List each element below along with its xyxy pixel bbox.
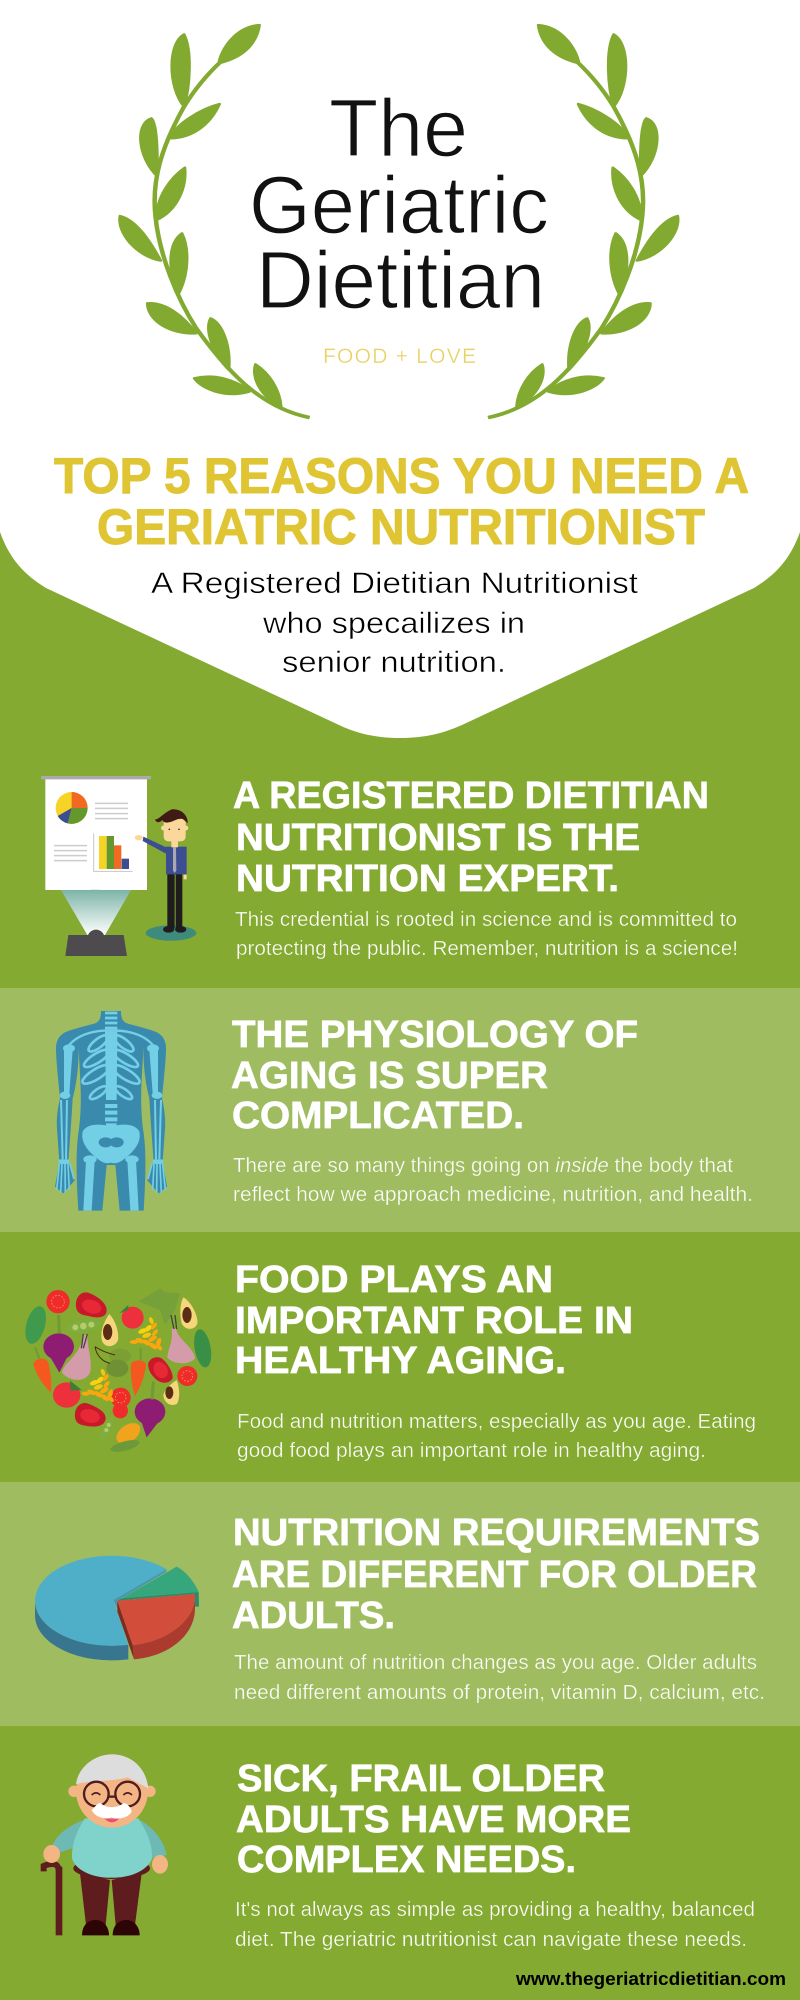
heading: HEALTHY AGING.: [235, 1340, 566, 1382]
left branch: [120, 25, 310, 418]
heading: [231, 1014, 638, 1137]
title: GERIATRIC NUTRITIONIST: [97, 499, 705, 555]
panel: light band reason 2: [0, 988, 800, 1232]
title: TOP 5 REASONS YOU NEED A: [54, 448, 749, 504]
icon: human skeleton x-ray: [55, 1011, 167, 1211]
heading: SICK, FRAIL OLDER: [237, 1758, 605, 1800]
body text: [233, 1155, 753, 1206]
green background with white header notch: [0, 532, 800, 2000]
heading: COMPLEX NEEDS.: [237, 1839, 576, 1881]
footer website URL: www.thegeriatricdietitian.com: [515, 1969, 786, 1989]
subtitle: who specailizes in: [262, 607, 525, 640]
heading: [232, 1512, 760, 1637]
icon: 3D pie chart: [35, 1556, 199, 1660]
body text: [235, 1899, 755, 1951]
logo: wordmark: Dietitian: [256, 235, 545, 326]
logo: tagline: FOOD + LOVE: [323, 345, 476, 368]
heading: THE PHYSIOLOGY OF: [232, 1014, 638, 1056]
body text: good food plays an important role in healthy aging.: [237, 1440, 706, 1462]
body text: protecting the public. Remember, nutrition is a science!: [236, 938, 738, 960]
body text: Food and nutrition matters, especially as you age. Eating: [237, 1411, 756, 1433]
body text: need different amounts of protein, vitamin D, calcium, etc.: [234, 1682, 765, 1704]
body text: There are so many things going on inside the body that: [233, 1155, 733, 1177]
subtitle: senior nutrition.: [282, 646, 506, 679]
logo: wordmark: [249, 83, 549, 326]
heading: FOOD PLAYS AN: [235, 1259, 553, 1301]
panel: reason 2: [55, 1011, 753, 1211]
heading: ADULTS.: [232, 1595, 395, 1637]
heading: AGING IS SUPER: [231, 1055, 548, 1097]
icon: heart of vegetables: [22, 1288, 214, 1454]
icon: presenter with projection screen: [41, 776, 196, 956]
logo: wordmark: The: [329, 83, 468, 174]
body text: diet. The geriatric nutritionist can navigate these needs.: [235, 1929, 747, 1951]
logo: laurel wreath: [120, 25, 678, 418]
subtitle: A Registered Dietitian Nutritionist: [151, 567, 639, 600]
heading: NUTRITIONIST IS THE: [236, 817, 640, 859]
panel: reason 1: [41, 775, 738, 960]
heading: [236, 1758, 631, 1881]
body text: It's not always as simple as providing a healthy, balanced: [235, 1899, 755, 1921]
body text: This credential is rooted in science and is committed to: [235, 909, 737, 931]
heading: A REGISTERED DIETITIAN: [233, 775, 709, 817]
title: [54, 448, 749, 555]
body text: [237, 1411, 756, 1462]
heading: NUTRITION REQUIREMENTS: [233, 1512, 760, 1554]
heading: ADULTS HAVE MORE: [236, 1799, 631, 1841]
heading: NUTRITION EXPERT.: [236, 858, 619, 900]
subtitle: [151, 567, 639, 679]
body text: [235, 909, 738, 960]
heading: [233, 775, 709, 900]
heading: COMPLICATED.: [232, 1095, 524, 1137]
icon: older man with cane: [43, 1754, 168, 1935]
panel: reason 3: [22, 1259, 756, 1462]
body text: [234, 1652, 765, 1704]
heading: ARE DIFFERENT FOR OLDER: [232, 1554, 757, 1596]
heading: IMPORTANT ROLE IN: [235, 1300, 633, 1342]
panel: light band reason 4: [0, 1482, 800, 1726]
logo: wordmark: Geriatric: [249, 160, 549, 251]
body text: The amount of nutrition changes as you age. Older adults: [234, 1652, 757, 1674]
right branch: [488, 25, 678, 418]
body text: reflect how we approach medicine, nutrition, and health.: [233, 1184, 753, 1206]
panel: reason 4: [35, 1512, 765, 1704]
heading: [235, 1259, 633, 1382]
panel: reason 5: [43, 1754, 755, 1951]
